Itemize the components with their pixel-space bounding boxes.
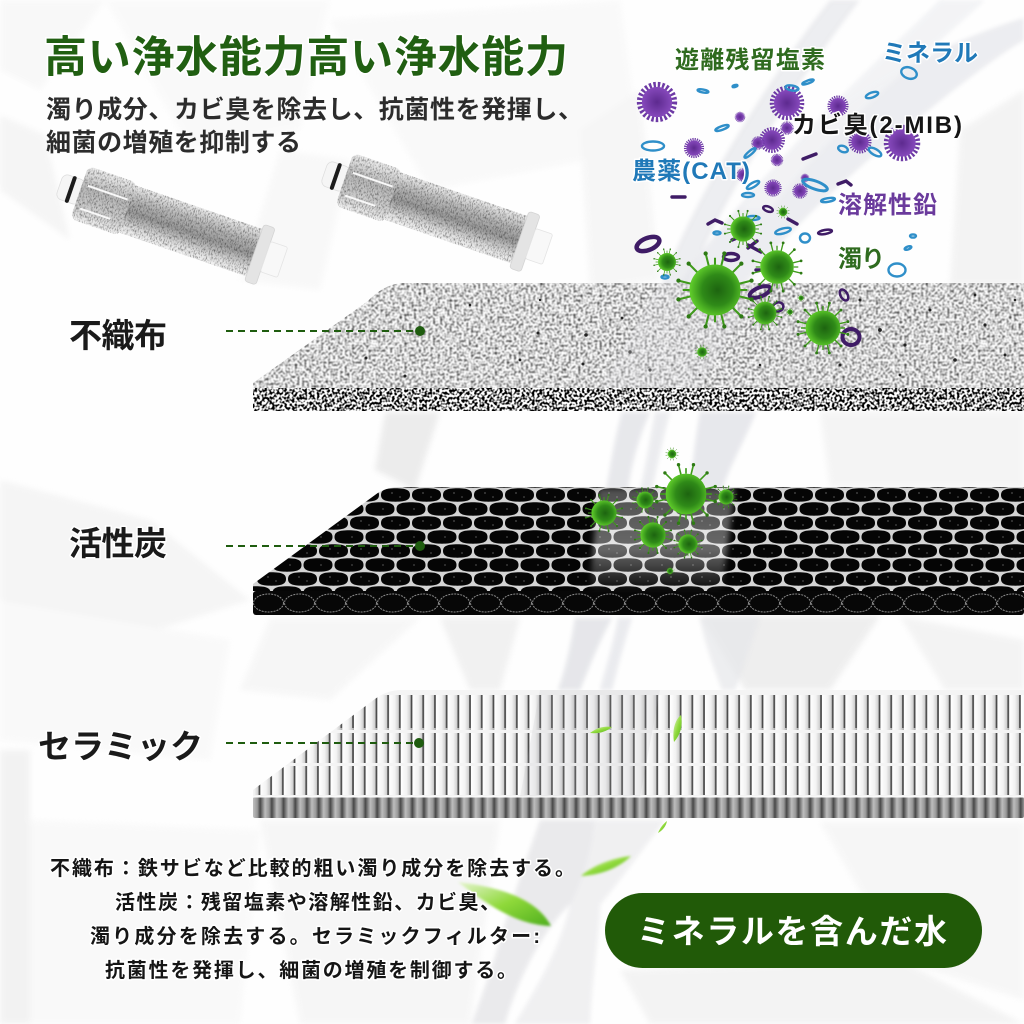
subtitle text: 濁り成分、カビ臭を除去し、抗菌性を発揮し、 xyxy=(46,96,583,124)
contaminants: green viruses above plate xyxy=(654,206,848,359)
green viruses trapped on carbon plate xyxy=(586,448,737,575)
label: ceramic xyxy=(38,728,424,765)
contaminant labels: 濁り xyxy=(838,246,885,273)
contaminants: purple mold particles xyxy=(642,87,916,197)
label: activated carbon xyxy=(69,525,425,562)
contaminant labels xyxy=(632,40,978,273)
description text block: 不織布：鉄サビなど比較的粗い濁り成分を除去する。 xyxy=(50,856,575,880)
subtitle text xyxy=(46,96,583,157)
falling leaves xyxy=(458,715,682,926)
title: 高い浄水能力高い浄水能力 xyxy=(44,34,568,82)
filter cartridge right xyxy=(315,144,557,278)
contaminants: dark purple lead rings xyxy=(635,154,860,345)
filter cartridge left xyxy=(50,157,292,291)
label: activated carbon: 活性炭 xyxy=(69,525,167,562)
contaminant labels: 溶解性鉛 xyxy=(838,192,937,219)
description text block xyxy=(50,856,575,982)
contaminant labels: カビ臭(2-MIB) xyxy=(792,112,962,139)
description text block: 活性炭：残留塩素や溶解性鉛、カビ臭、 xyxy=(115,890,500,914)
description text block: 抗菌性を発揮し、細菌の増殖を制御する。 xyxy=(105,959,517,982)
water stream: upper and lower flow xyxy=(472,0,1024,1024)
subtitle text: 細菌の増殖を抑制する xyxy=(46,129,301,157)
label: non-woven fabric: 不織布 xyxy=(69,317,167,354)
label: non-woven fabric xyxy=(69,317,425,354)
contaminants: blue mineral rings xyxy=(642,65,918,279)
callout pill: mineral water xyxy=(605,893,982,968)
layer: activated carbon plate xyxy=(250,485,1024,615)
callout pill: mineral water: ミネラルを含んだ水 xyxy=(637,913,947,950)
layer: non-woven fabric plate xyxy=(250,280,1024,411)
label: ceramic: セラミック xyxy=(38,728,203,765)
layer: ceramic plate xyxy=(250,688,1024,818)
description text block: 濁り成分を除去する。セラミックフィルター: xyxy=(90,924,540,948)
contaminant labels: 遊離残留塩素 xyxy=(675,46,825,74)
water splash on carbon plate xyxy=(590,488,735,590)
contaminant labels: ミネラル xyxy=(882,40,978,67)
contaminant labels: 農薬(CAT) xyxy=(632,158,750,185)
